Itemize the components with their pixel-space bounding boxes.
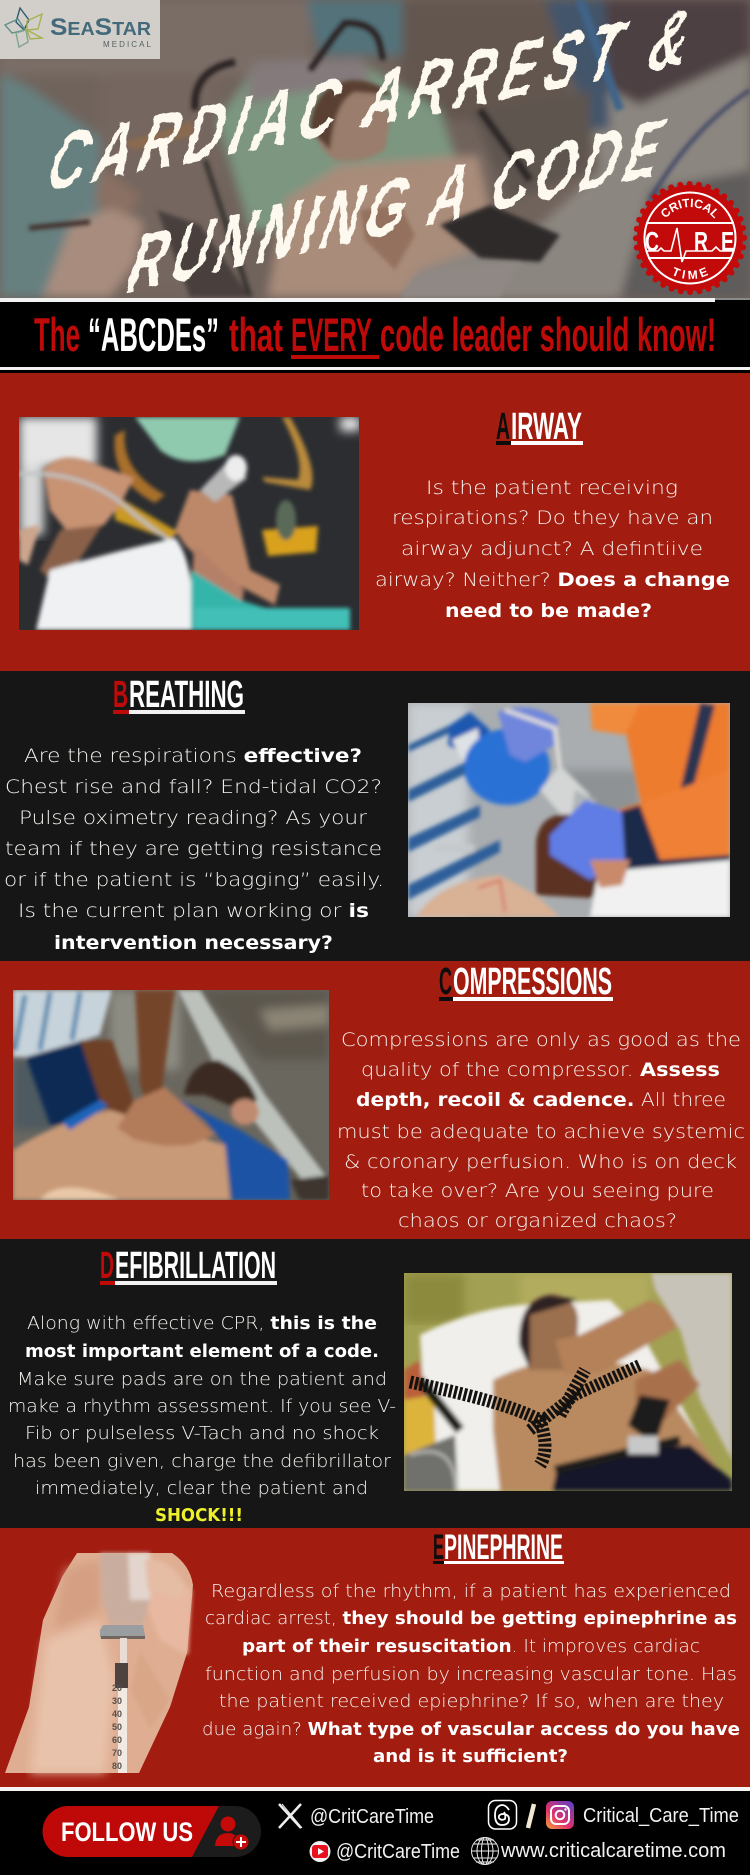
text: defibrillation body: make a rhythm assessment. If you see V- [8,1397,396,1417]
photo: hand holding syringe and vial [5,1553,193,1773]
text: defibrillation body: SHOCK!!! [155,1506,243,1526]
icon: add person [215,1816,249,1850]
header photo: hospital resuscitation scene [0,0,750,298]
footer [0,1787,750,1875]
photo: hand holding syringe and vial: 20 [112,1683,122,1693]
photo: hand holding syringe and vial: 50 [112,1722,122,1732]
heading: epinephrine [433,1528,564,1567]
title: Cardiac Arrest & Running a Code: RUNNING A CODE [116,100,677,311]
text: breathing body [4,745,384,954]
photo: hand holding syringe and vial: 40 [112,1709,122,1719]
text: defibrillation body: Make sure pads are on the patient and [17,1370,387,1390]
text: epinephrine body: cardiac arrest, they should be getting epinephrine as [205,1609,737,1629]
panel: epinephrine [0,1528,750,1787]
heading: epinephrine: PINEPHRINE [444,1528,563,1567]
band background [0,298,750,373]
text: compressions body: depth, recoil & cadence. All three [356,1089,726,1111]
icon: X logo [279,1804,302,1828]
text: compressions body: & coronary perfusion. Who is on deck [344,1151,737,1173]
text: breathing body: team if they are getting resistance [5,838,382,860]
subtitle banner: The [34,308,80,361]
title: Cardiac Arrest & Running a Code [36,0,704,311]
icon: threads [488,1800,516,1829]
photo: hand holding syringe and vial: 80 [112,1761,122,1771]
heading: defibrillation: D [100,1245,114,1287]
text: epinephrine body: Regardless of the rhythm, if a patient has experienced [211,1582,731,1602]
heading: breathing [113,674,245,716]
heading: epinephrine: E [433,1528,444,1567]
text: compressions body: chaos or organized chaos? [398,1210,677,1232]
text: airway body [375,477,730,622]
icon: youtube [310,1841,330,1862]
text: compressions body: Compressions are only as good as the [341,1029,741,1051]
subtitle banner [34,308,716,361]
icon: slash [528,1804,534,1828]
text: breathing body: Pulse oximetry reading? As your [19,807,367,829]
follow us pill: FOLLOW US [61,1817,193,1847]
badge: Critical Care Time [633,181,747,295]
text: defibrillation body: Fib or pulseless V-Tach and no shock [25,1424,379,1444]
subtitle banner: EVERY [291,308,372,361]
badge: Critical Care Time: T I M E [674,267,708,280]
icon: globe [472,1838,498,1864]
heading: defibrillation [100,1245,277,1287]
text: instagram handle: Critical_Care_Time [583,1805,739,1827]
text: epinephrine body: due again? What type of vascular access do you have [202,1720,740,1740]
text: breathing body: or if the patient is “bagging” easily. [4,869,384,891]
heading: airway: A [496,406,510,448]
logo: SeaStar Medical: MEDICAL [103,40,152,49]
panel: compressions [0,961,750,1239]
heading: breathing: B [113,674,128,716]
heading: airway [496,406,583,448]
text: breathing body: Chest rise and fall? End-tidal CO2? [5,776,382,798]
text: breathing body: intervention necessary? [54,932,333,954]
logo: SeaStar Medical: SEASTAR [50,14,151,41]
badge: Critical Care Time: R [694,226,708,257]
text: compressions body [337,1029,745,1232]
text: airway body: need to be made? [445,600,652,622]
heading: breathing: REATHING [129,674,244,716]
text: compressions body: to take over? Are you seeing pure [361,1180,714,1202]
heading: airway: IRWAY [511,406,582,448]
logo: SeaStar Medical [0,0,160,59]
text: website: www.criticalcaretime.com [500,1840,726,1862]
panel: breathing [0,671,750,961]
text: defibrillation body: most important element of a code. [25,1342,379,1362]
text: epinephrine body: part of their resuscitation . It improves cardiac [242,1637,700,1657]
text: defibrillation body: has been given, charge the defibrillator [13,1452,392,1472]
heading: compressions: C [439,961,452,1003]
heading: compressions [439,961,613,1003]
text: epinephrine body: and is it sufficient? [373,1747,568,1767]
photo: bag-valve-mask ventilation [408,703,730,917]
text: breathing body: Is the current plan working or is [18,900,369,922]
icon: instagram [546,1801,574,1829]
photo: hand holding syringe and vial: 70 [112,1748,122,1758]
follow us pill [43,1806,261,1857]
text: airway body: airway adjunct? A defintiive [401,538,703,560]
text: epinephrine body: function and perfusion by increasing vascular tone. Has [205,1665,737,1685]
subtitle banner: that [229,308,283,361]
heading: defibrillation: EFIBRILLATION [115,1245,276,1287]
text: airway body: respirations? Do they have an [392,507,713,529]
panel: airway [0,373,750,671]
badge: Critical Care Time: E [721,226,734,257]
heading: compressions: OMPRESSIONS [453,961,612,1003]
text: defibrillation body: Along with effective CPR, this is the [27,1314,377,1334]
badge: Critical Care Time: CRITICAL [661,198,717,218]
text: compressions body: must be adequate to achieve systemic [337,1121,745,1143]
text: defibrillation body [8,1314,396,1526]
text: airway body: airway? Neither? Does a change [375,569,730,591]
text: breathing body: Are the respirations effective? [24,745,362,767]
text: x handle: @CritCareTime [310,1806,434,1828]
text: youtube handle: @CritCareTime [336,1841,460,1863]
text: epinephrine body: the patient received epiephrine? If so, when are they [219,1692,724,1712]
text: defibrillation body: immediately, clear the patient and [35,1479,368,1499]
photo: chest compressions [13,990,329,1200]
text: airway body: Is the patient receiving [426,477,678,499]
photo: hand holding syringe and vial: 30 [112,1696,122,1706]
badge: Critical Care Time: C [645,226,659,257]
subtitle banner: “ABCDEs” [88,308,219,361]
text: compressions body: quality of the compressor. Assess [361,1059,720,1081]
panel: defibrillation [10,1252,732,1522]
photo: hand holding syringe and vial: 60 [112,1735,122,1745]
photo: airway intubation [19,417,360,630]
photo: defibrillator paddles on patient [404,1273,732,1491]
text: epinephrine body [202,1582,740,1767]
